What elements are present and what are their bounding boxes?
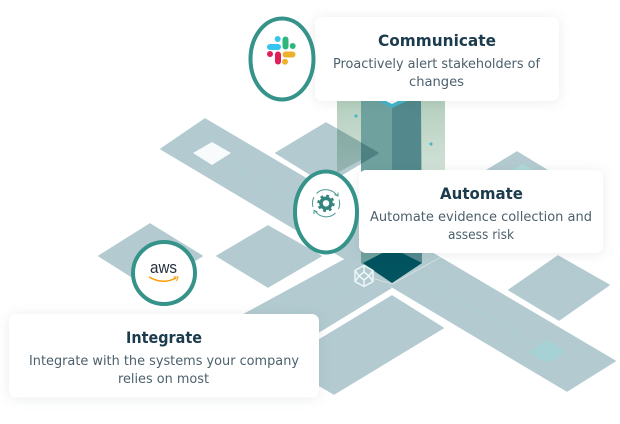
description: Integrate with the systems your company (29, 354, 299, 369)
tower left face (361, 101, 392, 283)
badge ring (133, 242, 195, 304)
badge ring (295, 172, 357, 252)
tile: upper-middle diamond overlapping tower (276, 123, 378, 184)
heading: Automate (440, 184, 523, 203)
card background (359, 170, 603, 253)
marker: white diamond (193, 142, 231, 165)
tile: lower plane (281, 296, 443, 394)
description: changes (409, 75, 464, 90)
card: Integrate (9, 314, 319, 398)
icon: slack logo (267, 36, 296, 65)
tile: upper-right diamond (466, 152, 568, 214)
description: relies on most (118, 372, 209, 387)
tower right face (392, 101, 422, 283)
icon: rotating gear (312, 190, 340, 217)
strip: long diagonal road (161, 119, 615, 391)
icon: aws logo: aws (150, 258, 177, 277)
badge: Automate gear (295, 172, 357, 252)
marker: pale teal diamond (528, 340, 566, 363)
icon: wireframe cube (355, 266, 373, 286)
card background (9, 314, 319, 398)
tile: right diamond (509, 256, 609, 320)
tower dot right (430, 142, 432, 146)
description: assess risk (448, 228, 514, 243)
connector lines (222, 160, 540, 347)
tower right glow band (421, 101, 445, 172)
description: Proactively alert stakeholders of (333, 57, 540, 72)
strip: lower-left road (200, 256, 392, 375)
description (370, 210, 592, 243)
heading: Integrate (126, 328, 202, 347)
tower (337, 101, 445, 283)
tower dot left (354, 114, 358, 118)
tower left glow band (337, 101, 361, 173)
tile: middle-left diamond (217, 226, 321, 287)
tile: inner pale diamond (504, 164, 542, 186)
isometric floor plan (99, 119, 615, 394)
tower top diamond (378, 101, 407, 108)
tile: left diamond (99, 224, 202, 288)
heading: Communicate (378, 31, 496, 50)
center dark tile (363, 248, 422, 283)
description (29, 354, 299, 387)
card: Automate (359, 170, 603, 253)
card background (315, 17, 559, 101)
badge: Slack (250, 18, 314, 100)
tower top highlight (386, 101, 398, 104)
badge ring (250, 18, 314, 100)
card: Communicate (315, 17, 559, 101)
description: Automate evidence collection and (370, 210, 592, 225)
description (333, 57, 540, 90)
badge: AWS (133, 242, 195, 304)
